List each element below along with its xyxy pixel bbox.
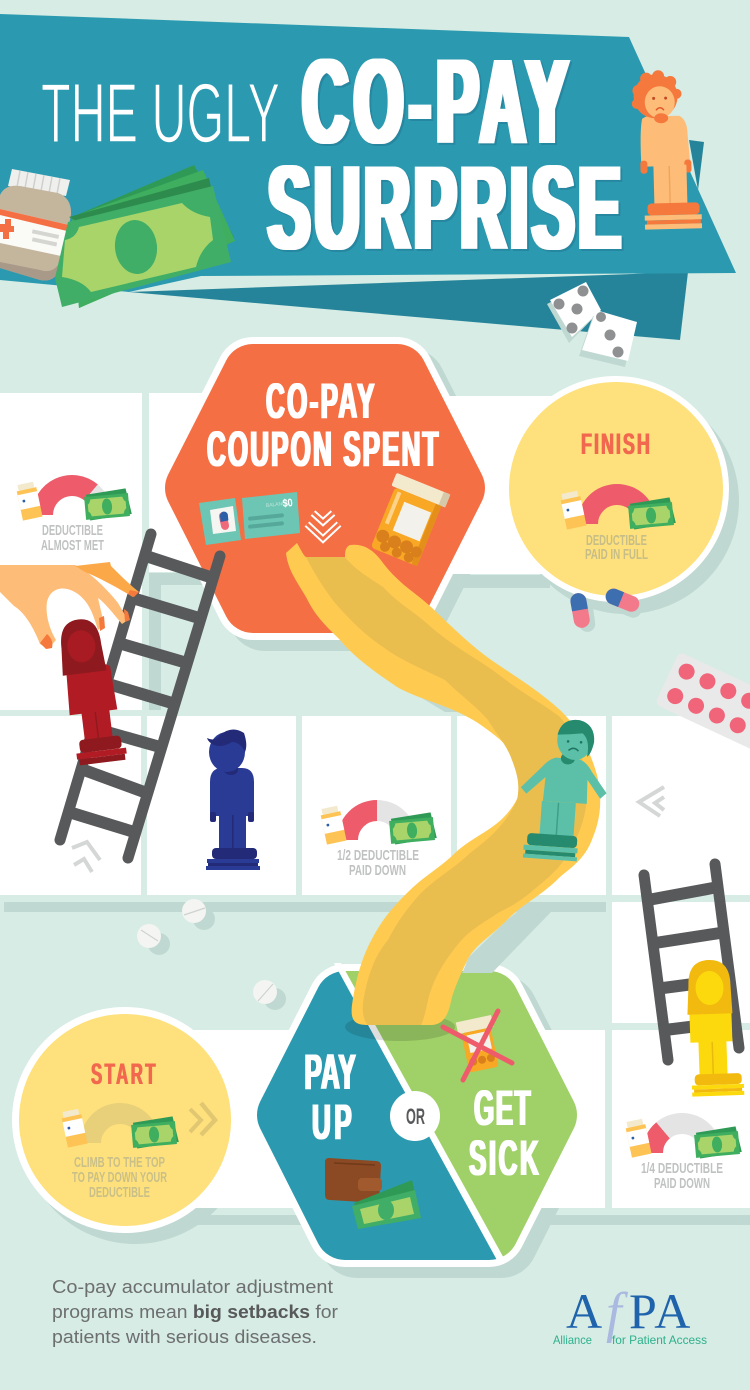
icon: yellow game pawn xyxy=(686,959,744,1097)
text block: closing statement: patients with serious diseases. xyxy=(52,1326,317,1347)
logo: Alliance for Patient Access: for Patient Access xyxy=(612,1333,707,1347)
gauge: quarter deductible paid down xyxy=(624,1118,742,1159)
panel: co-pay coupon spent hexagon xyxy=(195,374,455,603)
icon: blister pack of pills xyxy=(655,652,750,755)
icon: left chevrons xyxy=(639,787,664,816)
caption: climb to the top: DEDUCTIBLE xyxy=(89,1184,150,1201)
icon: wallet with cash xyxy=(325,1158,421,1229)
icon: crossed out pill bottle xyxy=(443,1011,512,1080)
text block: closing statement xyxy=(52,1276,338,1347)
icon: down chevrons xyxy=(307,513,339,539)
caption: half deductible paid down: PAID DOWN xyxy=(349,862,406,879)
logo: Alliance for Patient Access: Alliance xyxy=(553,1333,592,1347)
heading: get sick: GET xyxy=(474,1081,532,1136)
drop shadows of hexagons and circles xyxy=(22,385,739,1244)
logo: Alliance for Patient Access: PA xyxy=(629,1283,692,1339)
text block: closing statement: Co-pay accumulator adjustment xyxy=(52,1276,334,1297)
icon: slide xyxy=(286,543,600,1041)
gauge: half deductible paid down xyxy=(319,805,437,845)
icon: right ladder xyxy=(644,864,739,1060)
icon: blue game pawn xyxy=(206,729,260,870)
logo: Alliance for Patient Access xyxy=(553,1282,707,1347)
panel: finish circle xyxy=(503,376,729,602)
caption: quarter deductible paid down: PAID DOWN xyxy=(654,1175,710,1192)
icon: dice xyxy=(547,282,637,367)
panel: start circle xyxy=(12,1007,238,1233)
heading: pay up: UP xyxy=(312,1095,355,1150)
icon: stack of cash in banner xyxy=(55,165,235,308)
icon: small white tablets xyxy=(137,899,286,1010)
game board squares xyxy=(0,393,750,1225)
caption: deductible paid in full: DEDUCTIBLE xyxy=(586,532,647,549)
gauge: deductible paid in full xyxy=(559,490,676,530)
gauge: deductible almost met xyxy=(15,481,132,521)
caption: quarter deductible paid down xyxy=(641,1160,723,1192)
icon: medicine bottle in banner xyxy=(0,169,71,280)
icon: hand holding pawn xyxy=(0,562,139,649)
caption: climb to the top: CLIMB TO THE TOP xyxy=(74,1154,165,1171)
badge: or xyxy=(390,1091,440,1141)
title banner xyxy=(0,14,736,340)
caption: deductible almost met: ALMOST MET xyxy=(41,537,104,554)
icon: left ladder xyxy=(60,534,220,858)
icon: coupon: BALANCE xyxy=(266,501,290,509)
icon: up chevrons xyxy=(72,842,100,872)
logo: Alliance for Patient Access: f xyxy=(606,1282,629,1344)
caption: deductible almost met xyxy=(41,522,104,554)
icon: teal game pawn xyxy=(516,716,612,863)
heading: start: START xyxy=(91,1058,158,1091)
text block: closing statement: programs mean big setbacks for xyxy=(52,1301,338,1322)
heading: co-pay coupon spent: COUPON SPENT xyxy=(207,422,441,477)
caption: deductible almost met: DEDUCTIBLE xyxy=(42,522,103,539)
heading: pay up: PAY xyxy=(304,1045,357,1100)
title text xyxy=(41,35,625,275)
heading: get sick: SICK xyxy=(469,1131,541,1186)
icon: coupon xyxy=(199,492,300,545)
title text: SURPRISE xyxy=(268,141,625,275)
panel: pay up or get sick hexagon xyxy=(287,963,547,1262)
heading: pay up xyxy=(304,1045,357,1150)
badge: or: OR xyxy=(406,1104,425,1129)
icon: orange game pawn xyxy=(631,69,702,230)
icon: red game pawn xyxy=(56,616,127,766)
icon: orange pill bottle xyxy=(367,473,450,568)
caption: half deductible paid down: 1/2 DEDUCTIBLE xyxy=(337,847,419,864)
heading: co-pay coupon spent xyxy=(207,374,441,477)
icon: capsule pills near finish xyxy=(569,586,644,633)
heading: get sick xyxy=(469,1081,541,1186)
icon: right chevrons xyxy=(190,1103,215,1135)
logo: Alliance for Patient Access: A xyxy=(566,1283,602,1339)
title text: THE UGLY xyxy=(41,66,280,160)
caption: deductible paid in full: PAID IN FULL xyxy=(585,546,648,563)
caption: climb to the top xyxy=(72,1154,167,1201)
gauge: deductible empty xyxy=(60,1108,179,1149)
caption: climb to the top: TO PAY DOWN YOUR xyxy=(72,1169,167,1186)
heading: finish: FINISH xyxy=(581,429,652,461)
title text: CO-PAY xyxy=(302,35,574,169)
caption: half deductible paid down xyxy=(337,847,419,879)
heading: co-pay coupon spent: CO-PAY xyxy=(266,374,377,429)
icon: coupon: $0 xyxy=(282,497,293,510)
caption: deductible paid in full xyxy=(585,532,648,563)
